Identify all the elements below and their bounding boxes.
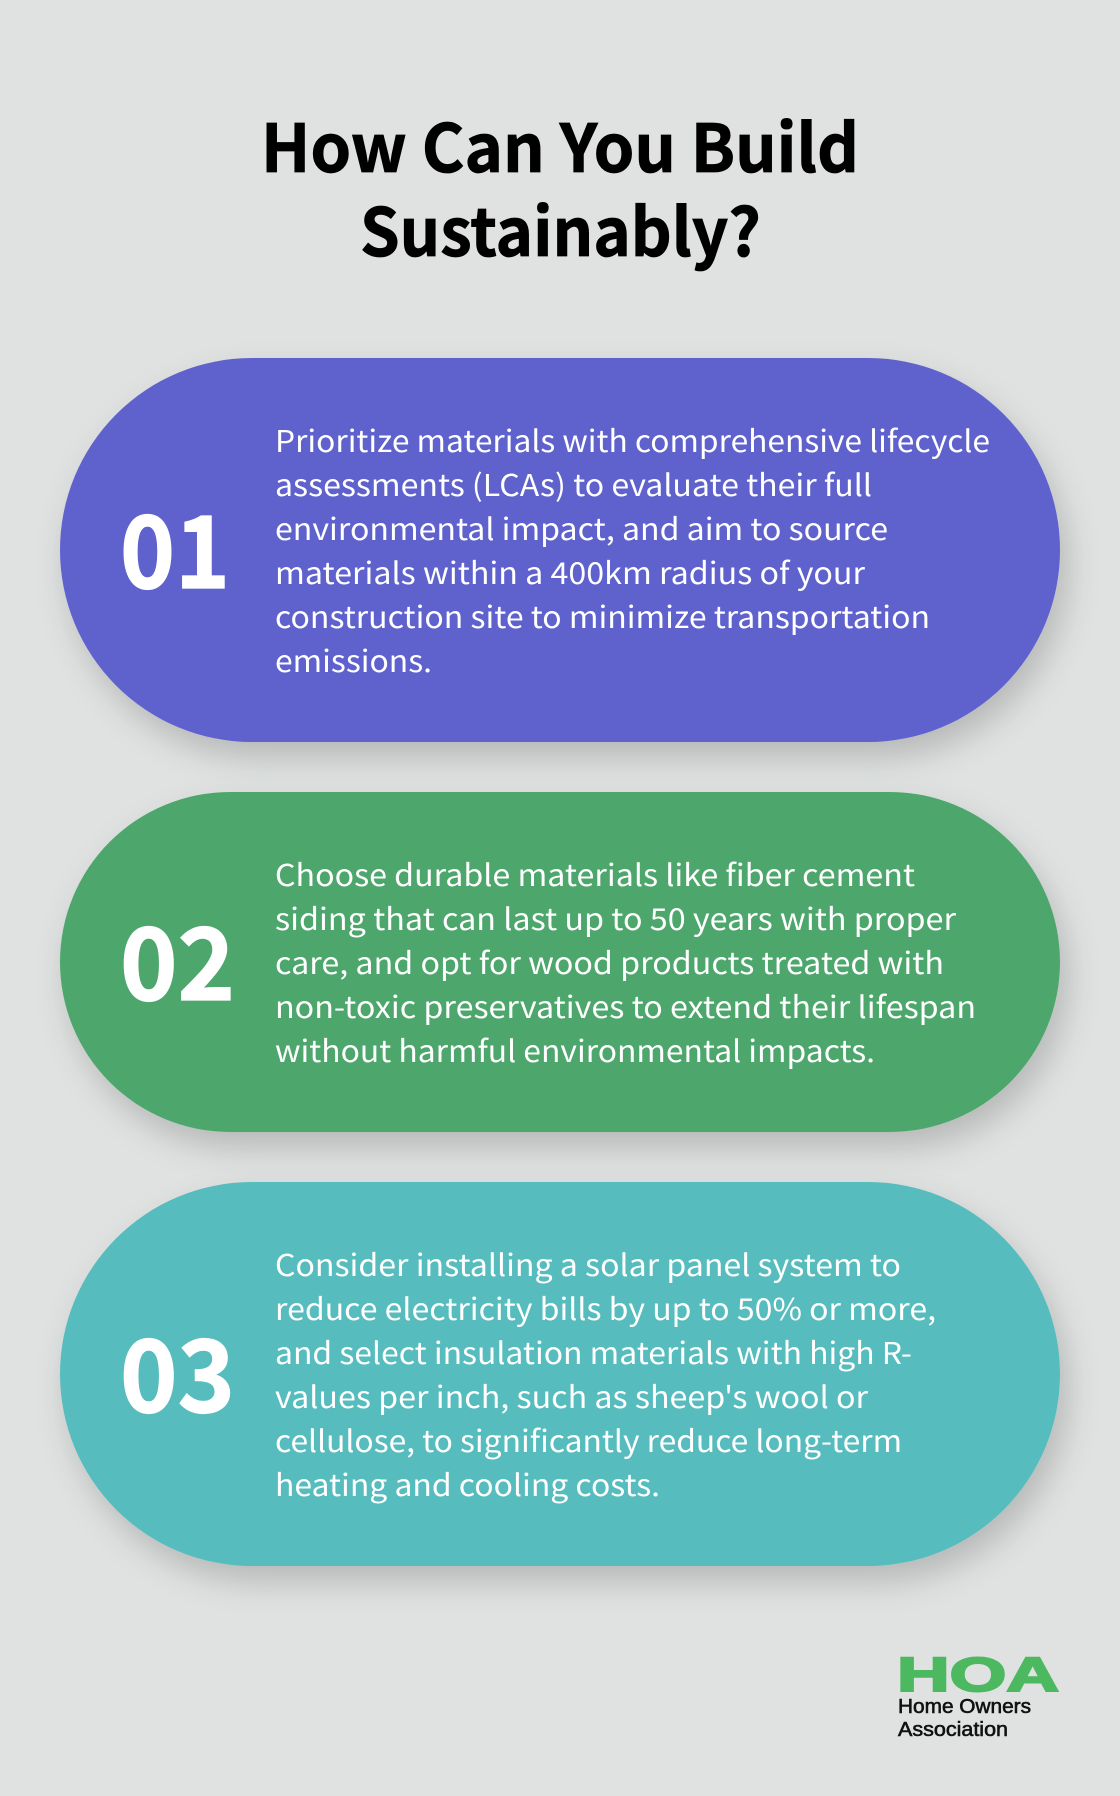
panel: step 02 — [60, 792, 1060, 1132]
panel: step 03 — [60, 1182, 1060, 1566]
title — [261, 96, 859, 276]
text block: step 03: cellulose, to significantly reduce long-term — [275, 1417, 902, 1461]
text block: step 01: environmental impact, and aim to source — [275, 505, 888, 549]
number 02: 02 — [120, 884, 235, 1029]
text block: step 02: without harmful environmental impacts. — [275, 1027, 875, 1071]
text block: step 02: siding that can last up to 50 years with proper — [275, 895, 956, 939]
text block: step 03: reduce electricity bills by up to 50% or more, — [275, 1285, 936, 1329]
logo: HOA Home Owners Association: HOA — [897, 1649, 1059, 1702]
text block: step 03: values per inch, such as sheep's wool or — [275, 1373, 868, 1417]
text block: step 03 — [275, 1241, 936, 1505]
text block: step 03: and select insulation materials with high R- — [275, 1329, 912, 1373]
text block: step 02: care, and opt for wood products treated with — [275, 939, 944, 983]
logo: HOA Home Owners Association: Association — [898, 1719, 1008, 1741]
text block: step 03: Consider installing a solar panel system to — [275, 1241, 901, 1285]
text block: step 03: heating and cooling costs. — [275, 1461, 660, 1505]
text block: step 01 — [275, 417, 990, 681]
number 01: 01 — [120, 472, 230, 617]
text block: step 01: materials within a 400km radius of your — [275, 549, 865, 593]
text block: step 01: emissions. — [275, 637, 432, 681]
text block: step 01: Prioritize materials with comprehensive lifecycle — [275, 417, 990, 461]
title: How Can You Build — [261, 96, 859, 192]
text block: step 02: Choose durable materials like fiber cement — [275, 851, 915, 895]
text block: step 02 — [275, 851, 976, 1071]
title: Sustainably? — [360, 180, 761, 276]
logo: HOA Home Owners Association: Home Owners — [898, 1696, 1031, 1718]
number 03: 03 — [120, 1296, 235, 1441]
text block: step 01: assessments (LCAs) to evaluate their full — [275, 461, 872, 505]
text block: step 02: non-toxic preservatives to extend their lifespan — [275, 983, 976, 1027]
text block: step 01: construction site to minimize transportation — [275, 593, 930, 637]
logo: HOA Home Owners Association — [897, 1649, 1059, 1741]
panel: step 01 — [60, 358, 1060, 742]
